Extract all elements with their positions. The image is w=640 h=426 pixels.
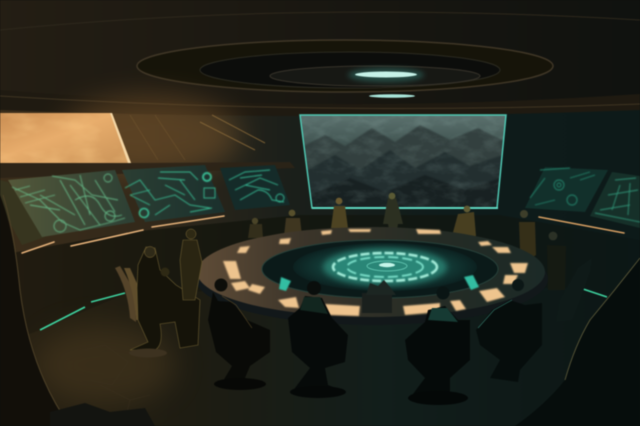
left curved foreground wall [0,195,70,426]
floor cracks [85,345,150,420]
right curved foreground wall [515,258,640,426]
dark band under window [0,162,295,178]
warm floor glow [35,325,175,405]
left wall screens [0,165,290,245]
front chair and person 3 [405,286,470,405]
small seated person [160,268,170,276]
front chair and person 4 [476,279,542,382]
front chair and person 2 [288,281,348,398]
glowing table panels [223,229,528,316]
right wall screens [525,167,640,228]
floor [0,290,640,426]
bright window [0,113,132,163]
screen 3 [220,165,290,210]
standing figures behind table [248,193,566,290]
hologram disc [323,248,447,286]
main mountain screen [300,115,506,209]
seated figure back 2 [452,206,476,236]
round table [196,227,548,325]
ceiling [0,0,640,116]
standing figure far centre [383,193,403,230]
warm glow on wall [60,95,240,175]
standing man, left [180,240,202,300]
chair far right [556,258,592,322]
front chair and person 1 [208,278,270,390]
screen 1 [8,170,135,237]
ceiling lights [348,68,424,98]
seated figure back 1 [331,198,348,228]
standing figure right 1 [519,210,536,262]
central console [366,280,396,295]
lower wall band [0,215,640,345]
green floor strips [40,289,607,330]
screen 2 [122,165,225,222]
standing figure right 2 [547,232,566,290]
foreground equipment bottom left [50,403,155,426]
person in chair, far left [115,229,202,358]
tablets on table [279,275,479,291]
back wall [0,95,640,305]
warm light strips [22,216,624,253]
wall ribs upper left [130,115,265,160]
seated figure back 3 [284,210,302,236]
seated figure back 4 [248,218,263,238]
